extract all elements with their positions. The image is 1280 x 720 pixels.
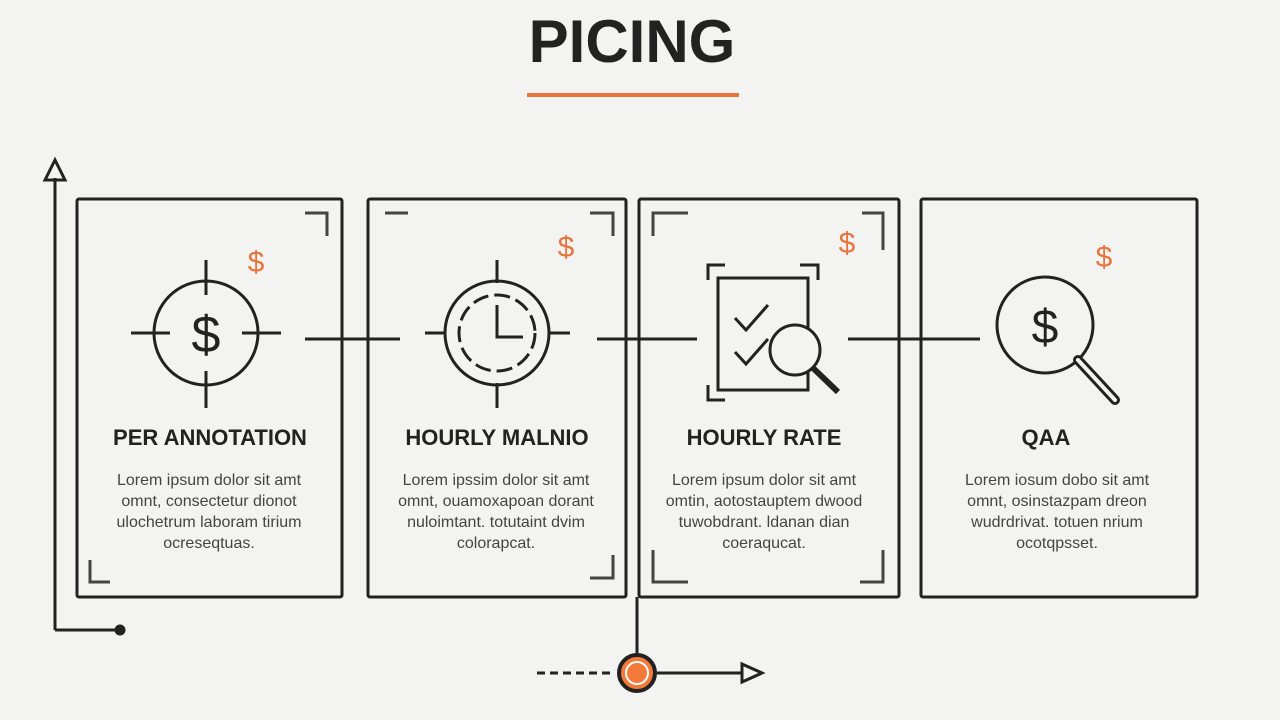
panel: hourly rate: omtin, aotostauptem dwood (666, 493, 862, 510)
panel: hourly: nuloimtant. totutaint dvim (407, 514, 585, 531)
panel: hourly rate: Lorem ipsum dolor sit amt (672, 472, 857, 489)
panel: qaa: omnt, osinstazpam dreon (967, 493, 1147, 510)
icon: clock target (425, 260, 570, 408)
panel: hourly: colorapcat. (457, 535, 535, 552)
panel: per annotation (77, 199, 342, 597)
panel: qaa: $ (1096, 241, 1113, 274)
panel: qaa (921, 199, 1197, 597)
icon: target dollar: $ (192, 306, 221, 364)
icon: dollar magnifier (997, 277, 1115, 400)
panel: per annotation: PER ANNOTATION (113, 425, 307, 450)
panel: hourly: Lorem ipssim dolor sit amt (403, 472, 590, 489)
panel: per annotation: omnt, consectetur dionot (121, 493, 297, 510)
axis: left vertical arrow (45, 160, 124, 634)
panel: hourly: HOURLY MALNIO (405, 425, 589, 450)
icon: dollar magnifier: $ (1032, 301, 1058, 354)
panel: hourly rate (639, 199, 899, 597)
panel: hourly rate: tuwobdrant. ldanan dian (679, 514, 849, 531)
icon: target dollar (131, 260, 281, 408)
panel: per annotation: $ (248, 246, 265, 279)
panel: qaa: Lorem iosum dobo sit amt (965, 472, 1150, 489)
icon: checklist magnifier (708, 265, 838, 400)
panel: hourly rate: HOURLY RATE (687, 425, 841, 450)
panel: hourly (368, 199, 626, 597)
panel: per annotation: ocreseqtuas. (163, 535, 255, 552)
connectors (305, 338, 980, 340)
bottom arrow with orange node (537, 597, 762, 691)
panel: per annotation: Lorem ipsum dolor sit amt (117, 472, 302, 489)
panel: qaa: ocotqpsset. (1016, 535, 1098, 552)
panel: qaa: QAA (1022, 425, 1071, 450)
panel: per annotation: ulochetrum laboram tirium (117, 514, 301, 531)
panel: hourly rate: $ (839, 227, 856, 260)
panel: hourly: $ (558, 231, 575, 264)
panel: qaa: wudrdrivat. totuen nrium (970, 514, 1143, 531)
panel: hourly: omnt, ouamoxapoan dorant (398, 493, 594, 510)
panel: hourly rate: coeraqucat. (722, 535, 806, 552)
title: PICING (529, 8, 735, 75)
